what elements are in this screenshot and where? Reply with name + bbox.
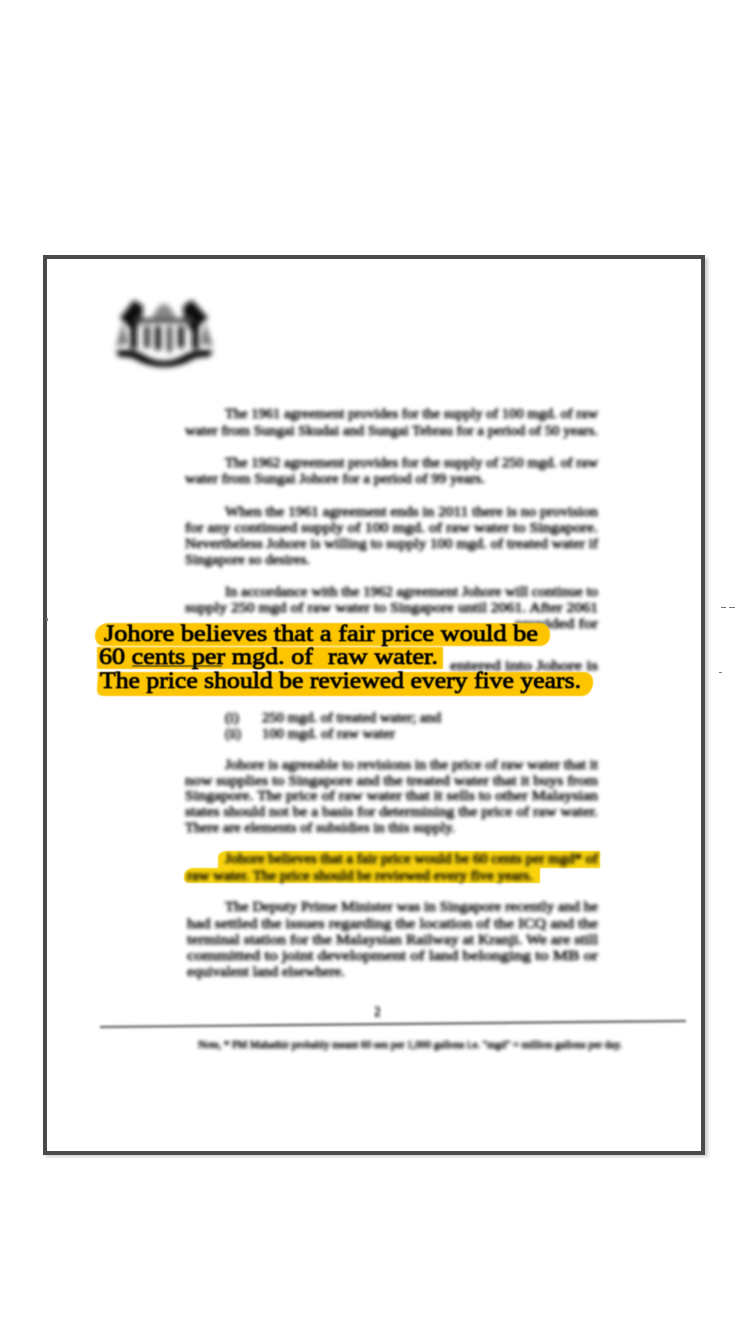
quote text — [99, 621, 581, 694]
quote text: The price should be reviewed every five years. — [100, 668, 581, 694]
footnote divider rule — [100, 1021, 686, 1027]
callout: enlarged highlighted quote — [95, 621, 593, 696]
footnote: Note, * PM Mahathir probably meant 60 sen per 1,000 gallons i.e. "mgd" = million gallons per day. — [198, 1040, 622, 1051]
quote text: Johore believes that a fair price would be — [104, 621, 538, 647]
text block: blurred letter body: 250 mgd. of treated water; and — [262, 710, 441, 725]
highlight bars — [95, 623, 593, 696]
text block: closing paragraph: committed to joint development of land belonging to MB or — [187, 948, 599, 963]
text block: blurred letter body: Johore is agreeable to revisions in the price of raw water that it — [225, 757, 598, 772]
small highlighted passage in letter — [184, 851, 600, 883]
text block: blurred letter body: water from Sungai Johore for a period of 99 years. — [185, 471, 485, 486]
quote text: raw water. — [328, 644, 438, 670]
text block: blurred letter body: The 1962 agreement provides for the supply of 250 mgd. of raw — [225, 455, 598, 470]
small highlighted passage in letter: raw water. The price should be reviewed every five years. — [187, 868, 533, 883]
text block: closing paragraph: The Deputy Prime Minister was in Singapore recently and he — [225, 899, 598, 914]
text block: blurred letter body: In accordance with the 1962 agreement Johore will continue to — [225, 584, 598, 599]
text block: blurred letter body: water from Sungai Skudai and Sungai Tebrau for a period of 50 years. — [185, 423, 598, 438]
text block: blurred letter body: When the 1961 agreement ends in 2011 there is no provision — [225, 504, 598, 519]
stray scan marks — [46, 607, 735, 673]
text block: blurred letter body: states should not be a basis for determining the price of raw water. — [185, 804, 598, 819]
text block: closing paragraph: terminal station for the Malaysian Railway at Kranji. We are still — [187, 932, 598, 947]
text block: blurred letter body: now supplies to Singapore and the treated water that it buys from — [185, 773, 599, 788]
icon: Johor coat of arms crest — [116, 300, 213, 367]
text block: blurred letter body: Singapore. The price of raw water that it sells to other Malaysian — [185, 788, 598, 803]
text block: blurred letter body: supply 250 mgd of raw water to Singapore until 2061. After 2061 — [185, 600, 598, 615]
page number: 2 — [374, 1004, 381, 1019]
quote text: 60 cents per mgd. of — [99, 644, 313, 670]
text block: blurred letter body: Nevertheless Johore is willing to supply 100 mgd. of treated water if — [185, 536, 599, 551]
text block: blurred letter body: entered into Johore is — [450, 658, 598, 673]
text block: closing paragraph — [187, 899, 599, 979]
text block: blurred letter body — [185, 406, 599, 835]
text block: blurred letter body: (ii) — [225, 726, 241, 741]
text block: closing paragraph: equivalent land elsewhere. — [187, 964, 345, 979]
text block: blurred letter body: provided for — [515, 616, 599, 631]
text block: blurred letter body: There are elements of subsidies in this supply. — [185, 820, 455, 835]
text block: blurred letter body: The 1961 agreement provides for the supply of 100 mgd. of raw — [225, 406, 598, 421]
small highlighted passage in letter: Johore believes that a fair price would be 60 cents per mgd* of — [225, 851, 599, 866]
panel: scanned letter frame — [45, 257, 708, 1157]
text block: blurred letter body: 100 mgd. of raw water — [262, 726, 396, 741]
text block: blurred letter body: (i) — [225, 710, 239, 725]
text block: closing paragraph: had settled the issues regarding the location of the ICQ and the — [187, 916, 598, 931]
text block: blurred letter body: Singapore so desires. — [185, 552, 310, 567]
text block: blurred letter body: for any continued supply of 100 mgd. of raw water to Singapore. — [185, 520, 598, 535]
